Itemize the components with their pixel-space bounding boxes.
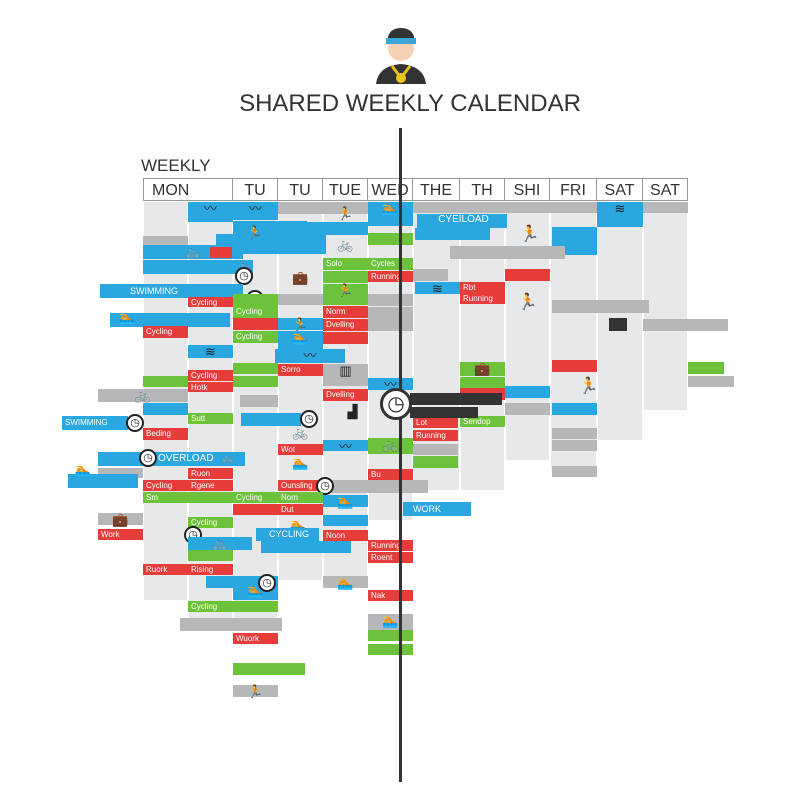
event blocks: Dvelling bbox=[326, 390, 354, 399]
event blocks: Rbt bbox=[463, 283, 475, 292]
event blocks: 🏊 bbox=[290, 517, 306, 532]
icon: athlete avatar bbox=[376, 28, 426, 84]
event blocks: Running bbox=[371, 272, 401, 281]
event blocks: Wot bbox=[281, 445, 295, 454]
subtitle: weekly: WEEKLY bbox=[141, 156, 211, 175]
event blocks: ◷ bbox=[188, 529, 198, 541]
event blocks: 🏃 bbox=[518, 294, 537, 311]
event blocks: 💼 bbox=[112, 512, 129, 527]
event blocks: Noon bbox=[326, 531, 345, 540]
event blocks: CYEILOAD bbox=[438, 214, 489, 225]
event blocks: 💼 bbox=[474, 361, 491, 376]
event blocks: Dut bbox=[281, 505, 293, 514]
event blocks: Sorro bbox=[281, 365, 301, 374]
event blocks: SWIMMING bbox=[65, 418, 108, 427]
event blocks: 🏊 bbox=[337, 575, 354, 590]
event blocks: ◷ bbox=[143, 452, 153, 464]
event blocks: 🏃 bbox=[292, 317, 309, 332]
event blocks: 🏃 bbox=[520, 226, 539, 243]
event blocks: 🚲 bbox=[292, 425, 309, 440]
event blocks: ▟ bbox=[348, 404, 358, 419]
event blocks: ≋ bbox=[432, 281, 443, 296]
event blocks: 🏊 bbox=[292, 455, 309, 470]
dark overlap bars bbox=[410, 393, 502, 418]
header row: TU bbox=[244, 182, 266, 199]
icon: clock: ◷ bbox=[387, 393, 405, 415]
event blocks: ▥ bbox=[339, 363, 352, 378]
event blocks: 🏊 bbox=[75, 462, 91, 477]
header row: SAT bbox=[650, 182, 680, 199]
event blocks: Nak bbox=[371, 591, 385, 600]
event blocks: Running bbox=[416, 431, 446, 440]
event blocks: ≋ bbox=[205, 344, 216, 359]
event blocks: 💼 bbox=[292, 270, 309, 285]
event blocks: ◷ bbox=[304, 413, 314, 425]
event blocks: Cycling bbox=[191, 602, 217, 611]
event blocks: Rising bbox=[191, 565, 213, 574]
panel: calendar grid bbox=[143, 178, 688, 618]
timeline: now line bbox=[399, 128, 402, 782]
event blocks: 🏃 bbox=[247, 225, 263, 240]
header row: TU bbox=[289, 182, 311, 199]
event blocks: Ounsling bbox=[281, 481, 313, 490]
icon: clock bbox=[380, 388, 412, 420]
event blocks: CYCLING bbox=[269, 529, 309, 539]
event blocks: Cycling bbox=[236, 307, 262, 316]
event blocks: 〰 bbox=[249, 201, 262, 216]
header row: TH bbox=[471, 182, 493, 199]
event blocks: Cycling bbox=[191, 518, 217, 527]
event blocks: Cycling bbox=[191, 371, 217, 380]
event blocks: 🚲 bbox=[382, 437, 399, 452]
event blocks: Cycling bbox=[191, 298, 217, 307]
event blocks: Ruork bbox=[146, 565, 167, 574]
header row: WED bbox=[371, 182, 409, 199]
event blocks: ◷ bbox=[250, 293, 260, 305]
event blocks: Ruon bbox=[191, 469, 210, 478]
event blocks: 🏃 bbox=[247, 684, 264, 699]
event blocks: Wuork bbox=[236, 634, 259, 643]
event blocks: 🏊 bbox=[119, 310, 135, 325]
event blocks: Sutt bbox=[191, 414, 205, 423]
event blocks: ◷ bbox=[130, 417, 140, 429]
event blocks: Running bbox=[463, 294, 493, 303]
event blocks: 🏊 bbox=[337, 494, 354, 509]
event blocks: ◷ bbox=[320, 480, 330, 492]
event blocks: 🚲 bbox=[337, 237, 354, 252]
event blocks: 〰 bbox=[384, 377, 397, 392]
event blocks: 〰 bbox=[303, 348, 316, 363]
header row: SAT bbox=[605, 182, 634, 199]
title: SHARED WEEKLY CALENDAR bbox=[239, 90, 581, 117]
event blocks: Hotk bbox=[191, 383, 207, 392]
event blocks: 〰 bbox=[339, 439, 352, 454]
event blocks: WORK bbox=[413, 504, 441, 514]
grid columns background bbox=[144, 202, 687, 618]
event blocks: Lot bbox=[416, 418, 427, 427]
header row: TUE bbox=[329, 182, 361, 199]
event blocks: OVERLOAD 🚲 bbox=[158, 453, 234, 464]
event blocks: Nom bbox=[281, 493, 298, 502]
event blocks: 🏊 bbox=[292, 330, 309, 345]
event blocks: SWIMMING bbox=[130, 286, 178, 296]
event blocks: Sm bbox=[146, 493, 158, 502]
event blocks: Solo bbox=[326, 259, 342, 268]
event blocks: 🏃 bbox=[337, 206, 354, 221]
event blocks: Rgene bbox=[191, 481, 215, 490]
event blocks: Roent bbox=[371, 553, 392, 562]
event blocks: Cycling bbox=[146, 327, 172, 336]
event blocks: Cycling bbox=[146, 481, 172, 490]
event blocks: ◷ bbox=[262, 577, 272, 589]
event blocks: 〰 bbox=[204, 201, 217, 216]
event blocks: Dvelling bbox=[326, 320, 354, 329]
event blocks: Norm bbox=[326, 307, 346, 316]
event blocks: Bu bbox=[371, 470, 381, 479]
event blocks: 🏊 bbox=[382, 613, 399, 628]
event blocks: 🚲 bbox=[212, 536, 228, 551]
event blocks: 🏊 bbox=[382, 201, 399, 216]
header row bbox=[143, 178, 688, 201]
event blocks: Work bbox=[101, 530, 120, 539]
event blocks: ◷ bbox=[239, 270, 249, 282]
header row: MON bbox=[152, 182, 189, 199]
event blocks: 🚲 bbox=[185, 244, 201, 259]
event blocks: Cycles bbox=[371, 259, 395, 268]
event blocks: Running bbox=[371, 541, 401, 550]
header row: SHI bbox=[514, 182, 540, 199]
event blocks: ≋ bbox=[615, 201, 625, 216]
event blocks: Cycling bbox=[236, 493, 262, 502]
header row: FRI bbox=[560, 182, 586, 199]
event blocks: 🏊 bbox=[247, 583, 264, 598]
event blocks: 🏃 bbox=[337, 283, 354, 298]
event blocks: Sendop bbox=[463, 417, 491, 426]
event blocks: Beding bbox=[146, 429, 171, 438]
event blocks: 🚲 bbox=[135, 388, 151, 403]
event blocks: 🏃 bbox=[579, 378, 598, 395]
event blocks: Cycling bbox=[236, 332, 262, 341]
header row: THE bbox=[420, 182, 452, 199]
event blocks: 🚲 bbox=[237, 259, 253, 274]
